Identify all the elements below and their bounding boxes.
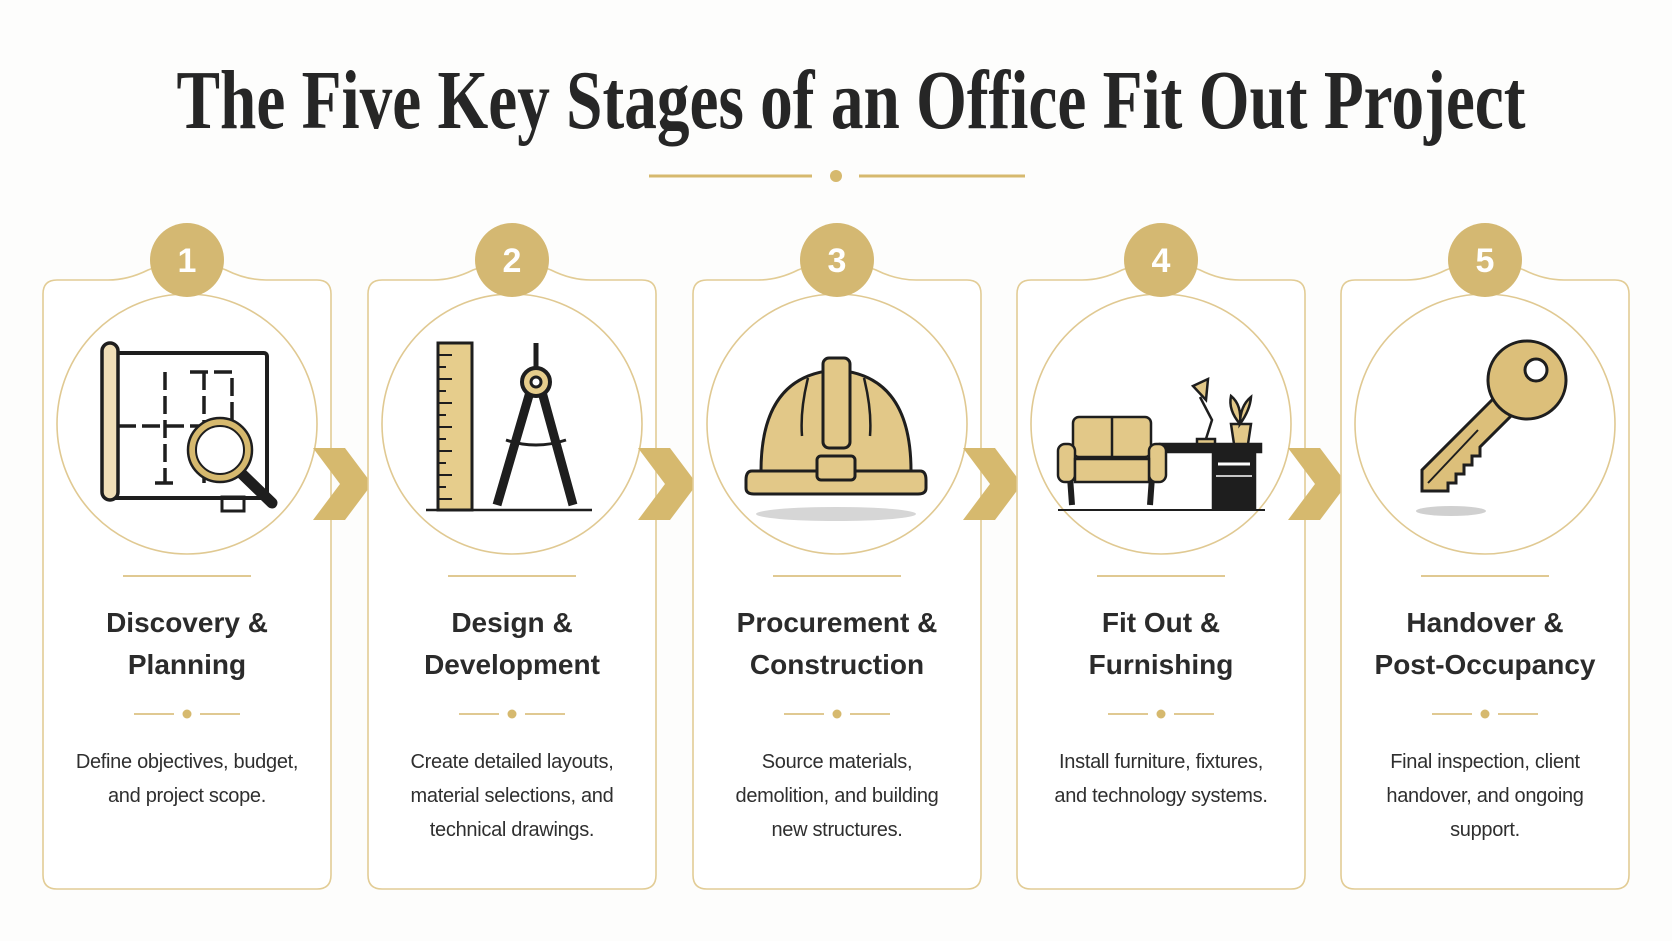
- description 4: Install furniture, fixtures,: [1059, 751, 1263, 773]
- description 4: and technology systems.: [1054, 785, 1268, 807]
- heading: Fit Out & Furnishing: Fit Out &: [1102, 607, 1220, 638]
- description 1: and project scope.: [108, 785, 266, 807]
- arrow 3: [963, 448, 1022, 520]
- description 1: Define objectives, budget,: [76, 751, 298, 773]
- description 3: new structures.: [771, 819, 903, 841]
- number badge 3: 3: [828, 242, 846, 280]
- arrow 1: [313, 448, 372, 520]
- description 5: support.: [1450, 819, 1520, 841]
- number badge 1: 1: [178, 242, 196, 280]
- icon: ruler and compass: [426, 343, 592, 510]
- heading: Design & Development: Development: [424, 649, 600, 680]
- icon: key: [1416, 341, 1566, 516]
- heading: Handover & Post-Occupancy: Post-Occupancy: [1375, 649, 1596, 680]
- heading: Design & Development: Design &: [451, 607, 573, 638]
- panel: stage 2: [368, 223, 656, 889]
- panel: stage 4: [1017, 223, 1305, 889]
- heading: Fit Out & Furnishing: Furnishing: [1089, 649, 1233, 680]
- icon: blueprint with magnifier: [102, 343, 272, 511]
- number badge 5: 5: [1476, 242, 1494, 280]
- heading: Discovery & Planning: Discovery &: [106, 607, 268, 638]
- icon: sofa and desk: [1058, 379, 1265, 510]
- panel: stage 5: [1341, 223, 1629, 889]
- arrow 4: [1288, 448, 1347, 520]
- number badge 4: 4: [1152, 242, 1171, 280]
- number badge 1: [150, 223, 224, 297]
- description 3: Source materials,: [762, 751, 912, 773]
- heading: Discovery & Planning: Planning: [128, 649, 246, 680]
- arrow 2: [638, 448, 697, 520]
- description 5: handover, and ongoing: [1386, 785, 1584, 807]
- number badge 5: [1448, 223, 1522, 297]
- description 2: technical drawings.: [430, 819, 594, 841]
- number badge 3: [800, 223, 874, 297]
- title divider: [649, 170, 1025, 182]
- panel: stage 1: [43, 223, 331, 889]
- heading: Handover & Post-Occupancy: Handover &: [1406, 607, 1564, 638]
- heading: Procurement & Construction: Construction: [750, 649, 924, 680]
- number badge 4: [1124, 223, 1198, 297]
- description 2: Create detailed layouts,: [411, 751, 613, 773]
- description 2: material selections, and: [411, 785, 613, 807]
- icon: hard hat: [746, 358, 926, 521]
- number badge 2: [475, 223, 549, 297]
- number badge 2: 2: [503, 242, 521, 280]
- panel: stage 3: [693, 223, 981, 889]
- description 3: demolition, and building: [736, 785, 938, 807]
- description 5: Final inspection, client: [1390, 751, 1581, 773]
- heading: Procurement & Construction: Procurement &: [737, 607, 937, 638]
